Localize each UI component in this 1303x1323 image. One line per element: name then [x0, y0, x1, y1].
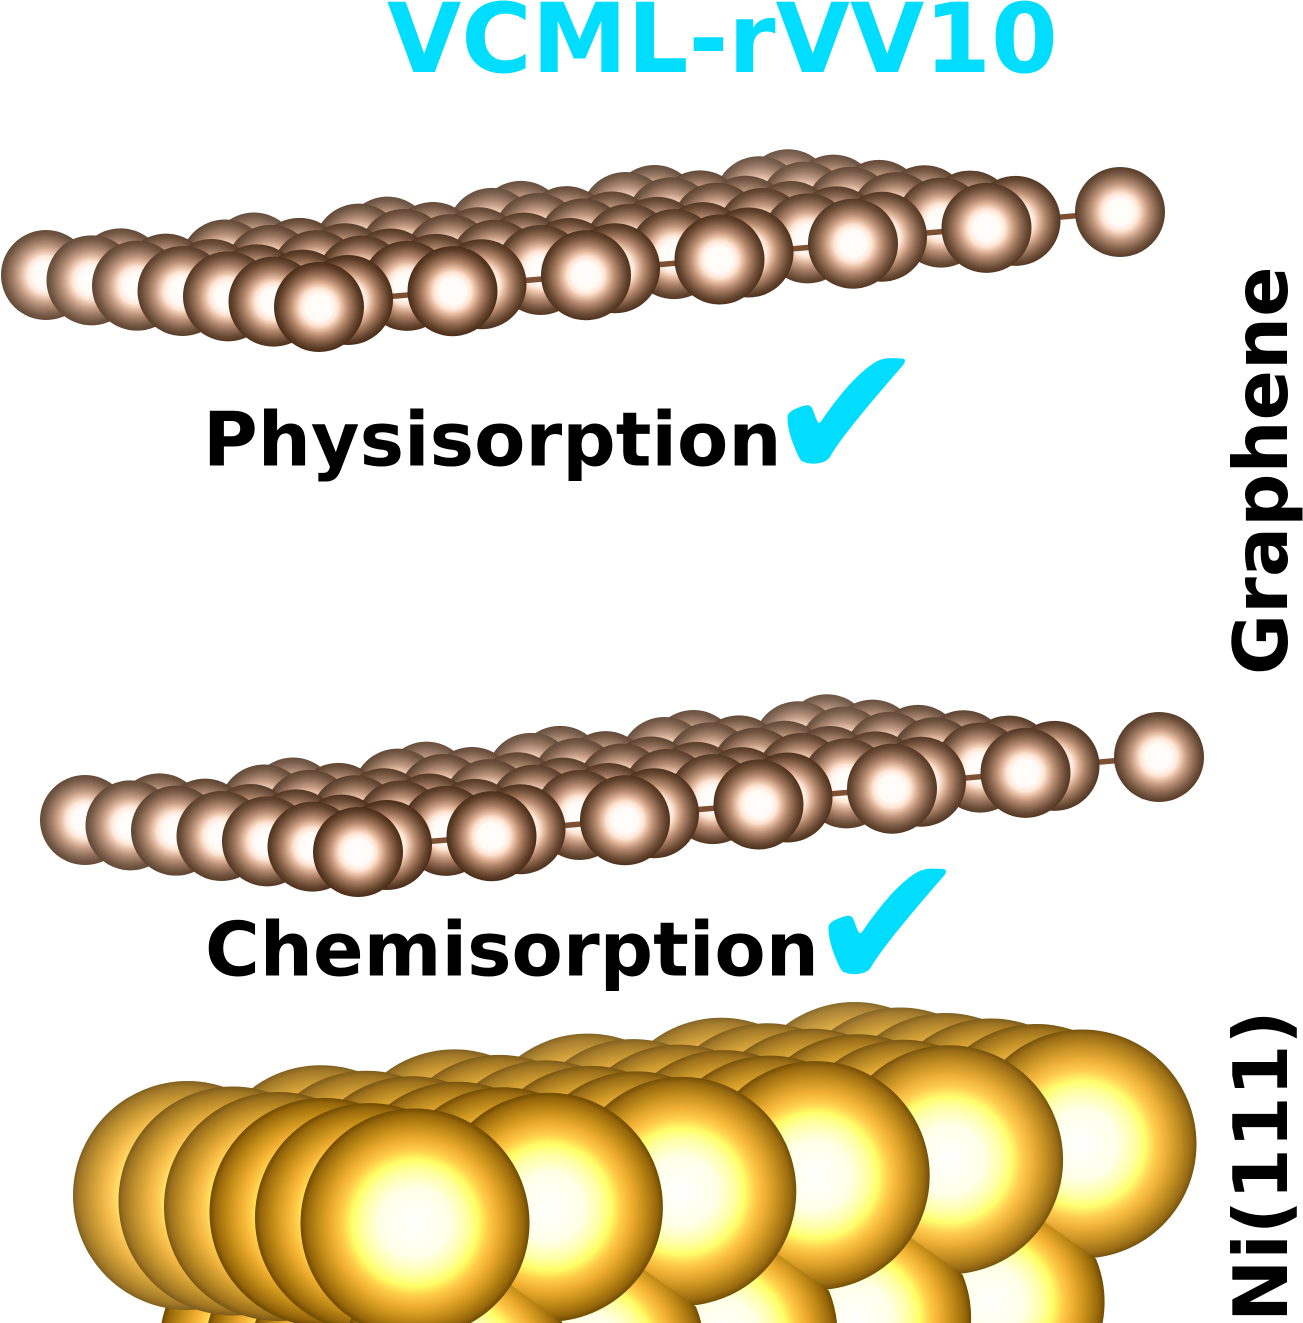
upper layer row 3 — [164, 1013, 1060, 1321]
upper layer row 2 — [209, 1018, 1105, 1323]
upper layer row 1 — [255, 1024, 1151, 1323]
icon: cyan check mark (chemisorption): ✔ — [806, 811, 969, 1037]
atom row 0 (front) — [274, 167, 1165, 352]
upper layer row 5 — [73, 1002, 969, 1310]
upper layer row 4 — [118, 1008, 1014, 1316]
lower layer, rear atoms — [162, 1230, 519, 1323]
atom row 4 — [92, 155, 878, 331]
graphene sheet: chemisorption — [40, 694, 1204, 897]
atom row 3 — [138, 160, 924, 336]
bonds — [348, 212, 1120, 300]
vertical label: Graphene: Graphene — [1218, 266, 1303, 675]
front row with lower-layer atoms interleaved — [300, 1030, 1196, 1323]
icon: cyan check mark (physisorption): ✔ — [765, 300, 928, 526]
label: Chemisorption: Chemisorption — [205, 906, 819, 994]
vertical label: Ni(111): Ni(111) — [1218, 1010, 1303, 1322]
Ni(111) slab — [73, 1002, 1196, 1323]
graphene sheet: physisorption — [1, 149, 1165, 352]
atom row 2 — [183, 165, 970, 341]
label: Physisorption: Physisorption — [203, 396, 782, 484]
atom row 5 (rear) — [1, 149, 833, 325]
atom row 1 — [228, 171, 1015, 347]
